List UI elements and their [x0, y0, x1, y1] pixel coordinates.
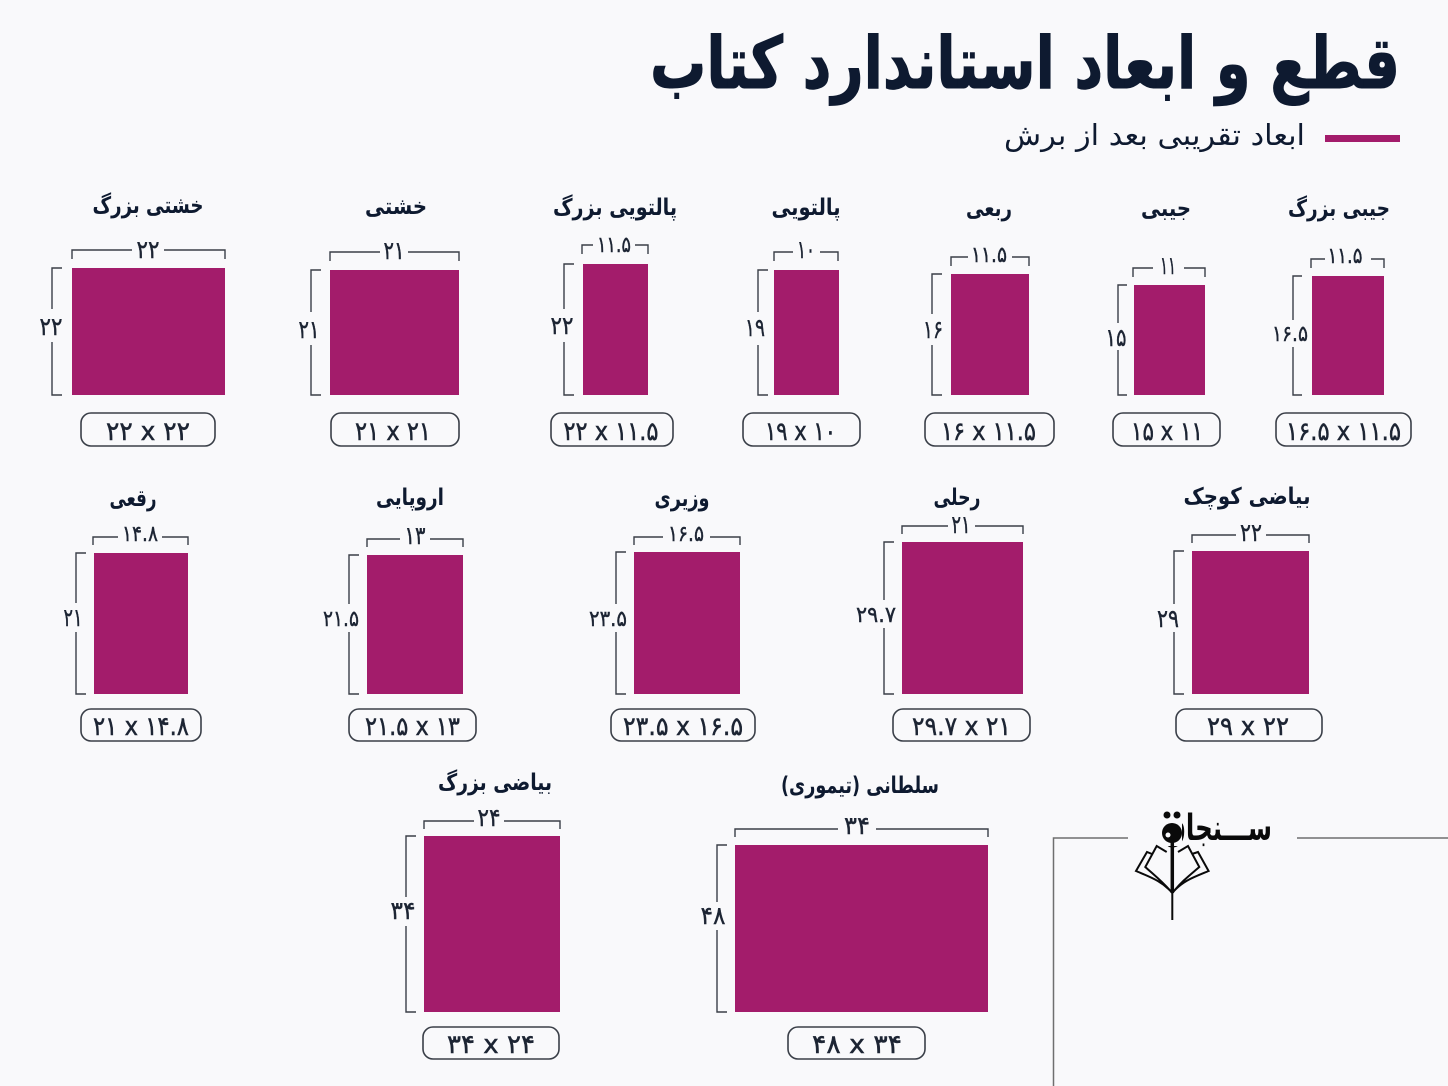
heading: وزیری — [654, 486, 710, 512]
height dimension — [923, 274, 943, 395]
heading: بیاضی کوچک — [1184, 484, 1310, 510]
heading: جیبی بزرگ — [1288, 195, 1390, 222]
logo frame — [1054, 838, 1448, 1086]
size pill: ۲۲ x ۱۱.۵ — [564, 417, 658, 447]
panel: rahli — [856, 485, 1030, 742]
width dimension — [330, 236, 459, 265]
height dimension: ۱۶ — [923, 315, 943, 344]
width dimension — [1311, 244, 1384, 269]
height dimension — [856, 542, 896, 694]
book rectangle — [1134, 285, 1205, 395]
size pill: ۱۹ x ۱۰ — [765, 417, 836, 447]
panel: paltoyi bozorg — [550, 194, 677, 447]
height dimension: ۴۸ — [700, 901, 726, 930]
heading: خشتی — [365, 194, 427, 220]
width dimension — [367, 521, 463, 550]
heading: پالتویی — [772, 195, 840, 221]
heading: رقعی — [110, 486, 156, 512]
width dimension: ۱۳ — [404, 521, 426, 550]
height dimension — [1157, 551, 1184, 694]
width dimension: ۲۴ — [478, 803, 500, 832]
width dimension: ۲۱ — [952, 510, 970, 539]
heading: رحلی — [934, 485, 980, 511]
size pill: ۲۱.۵ x ۱۳ — [365, 712, 460, 742]
width dimension: ۱۱ — [1160, 251, 1176, 280]
height dimension — [1106, 285, 1127, 395]
width dimension — [774, 235, 838, 264]
book rectangle — [424, 836, 560, 1012]
width dimension: ۳۴ — [844, 811, 870, 840]
book rectangle — [1192, 551, 1309, 694]
book rectangle — [951, 274, 1029, 395]
heading: اروپایی — [376, 485, 444, 511]
width dimension — [582, 233, 648, 258]
height dimension — [589, 552, 627, 694]
height dimension — [64, 553, 86, 694]
book rectangle — [902, 542, 1023, 694]
height dimension — [323, 555, 359, 694]
height dimension: ۲۱ — [298, 315, 320, 344]
size pill: ۱۶ x ۱۱.۵ — [941, 417, 1036, 447]
height dimension — [390, 836, 416, 1012]
book rectangle — [634, 552, 740, 694]
heading: سلطانی (تیموری) — [781, 773, 939, 799]
size pill: ۳۴ x ۲۴ — [447, 1030, 535, 1060]
width dimension: ۱۶.۵ — [668, 522, 704, 547]
height dimension: ۲۹ — [1157, 604, 1179, 633]
panel: bayazi kuchak — [1157, 484, 1322, 742]
height dimension: ۱۶.۵ — [1272, 322, 1308, 347]
height dimension: ۲۹.۷ — [856, 603, 896, 628]
panel: khesti bozorg — [40, 192, 225, 447]
width dimension — [1192, 518, 1309, 547]
height dimension — [298, 270, 321, 395]
book rectangle — [94, 553, 188, 694]
size pill: ۲۲ x ۲۲ — [106, 417, 190, 447]
panel: paltoyi — [743, 195, 860, 447]
size pill: ۱۵ x ۱۱ — [1131, 417, 1203, 447]
size pill: ۲۱ x ۲۱ — [355, 417, 431, 447]
size pill: ۲۹ x ۲۲ — [1207, 712, 1289, 742]
height dimension — [700, 845, 727, 1012]
height dimension — [550, 264, 574, 395]
size pill: ۱۶.۵ x ۱۱.۵ — [1286, 417, 1401, 447]
width dimension — [1133, 251, 1205, 280]
book rectangle — [72, 268, 225, 395]
panel: oropayi — [323, 485, 476, 742]
width dimension — [902, 510, 1023, 539]
size pill: ۴۸ x ۳۴ — [812, 1030, 902, 1060]
panel: bayazi bozorg — [390, 769, 560, 1060]
width dimension: ۲۱ — [384, 236, 404, 265]
panel: vaziri — [589, 486, 755, 742]
height dimension: ۳۴ — [390, 896, 416, 925]
height dimension: ۱۵ — [1106, 323, 1126, 352]
height dimension — [1272, 276, 1308, 395]
book rectangle — [330, 270, 459, 395]
width dimension — [634, 522, 740, 547]
subtitle: ابعاد تقریبی بعد از برش — [1004, 118, 1305, 152]
heading: جیبی — [1141, 196, 1191, 222]
width dimension — [93, 522, 188, 547]
panel: khesti — [298, 194, 459, 447]
panel: robi — [923, 196, 1054, 447]
width dimension: ۱۱.۵ — [597, 233, 631, 258]
width dimension — [424, 803, 560, 832]
height dimension: ۲۲ — [40, 312, 62, 341]
height dimension: ۲۳.۵ — [589, 607, 627, 632]
panel: jibi — [1106, 196, 1220, 447]
width dimension — [951, 243, 1029, 268]
size pill — [423, 1027, 559, 1060]
height dimension: ۲۱ — [64, 603, 82, 632]
height dimension: ۲۲ — [550, 311, 574, 340]
width dimension: ۱۰ — [797, 235, 815, 264]
width dimension: ۲۲ — [1240, 518, 1262, 547]
heading: خشتی بزرگ — [92, 192, 204, 219]
size pill — [743, 413, 860, 447]
heading: ربعی — [966, 196, 1012, 222]
panel: jibi bozorg — [1272, 195, 1411, 447]
height dimension — [40, 268, 62, 395]
height dimension: ۲۱.۵ — [323, 607, 359, 632]
size pill — [788, 1027, 925, 1060]
book rectangle — [774, 270, 839, 395]
book rectangle — [1312, 276, 1384, 395]
width dimension: ۱۱.۵ — [971, 243, 1007, 268]
heading: پالتویی بزرگ — [553, 194, 677, 221]
width dimension — [72, 235, 225, 264]
width dimension: ۱۱.۵ — [1328, 244, 1362, 269]
size pill — [331, 413, 459, 447]
size pill: ۲۳.۵ x ۱۶.۵ — [623, 712, 743, 742]
size pill: ۲۹.۷ x ۲۱ — [912, 712, 1011, 742]
width dimension — [735, 811, 988, 840]
size pill — [81, 413, 215, 447]
icon: sanjagh logo — [1136, 808, 1272, 920]
size pill — [1176, 709, 1322, 742]
height dimension — [745, 270, 768, 395]
heading: بیاضی بزرگ — [438, 769, 552, 796]
height dimension: ۱۹ — [745, 313, 765, 342]
width dimension: ۱۴.۸ — [122, 522, 158, 547]
book rectangle — [583, 264, 648, 395]
panel: roghi — [64, 486, 201, 742]
panel: soltani — [700, 773, 988, 1060]
book rectangle — [367, 555, 463, 694]
subtitle accent bar — [1325, 135, 1400, 142]
size pill: ۲۱ x ۱۴.۸ — [93, 712, 189, 742]
width dimension: ۲۲ — [136, 235, 160, 264]
book rectangle — [735, 845, 988, 1012]
icon: sanjagh logo: ســـنجاق — [1164, 808, 1272, 849]
